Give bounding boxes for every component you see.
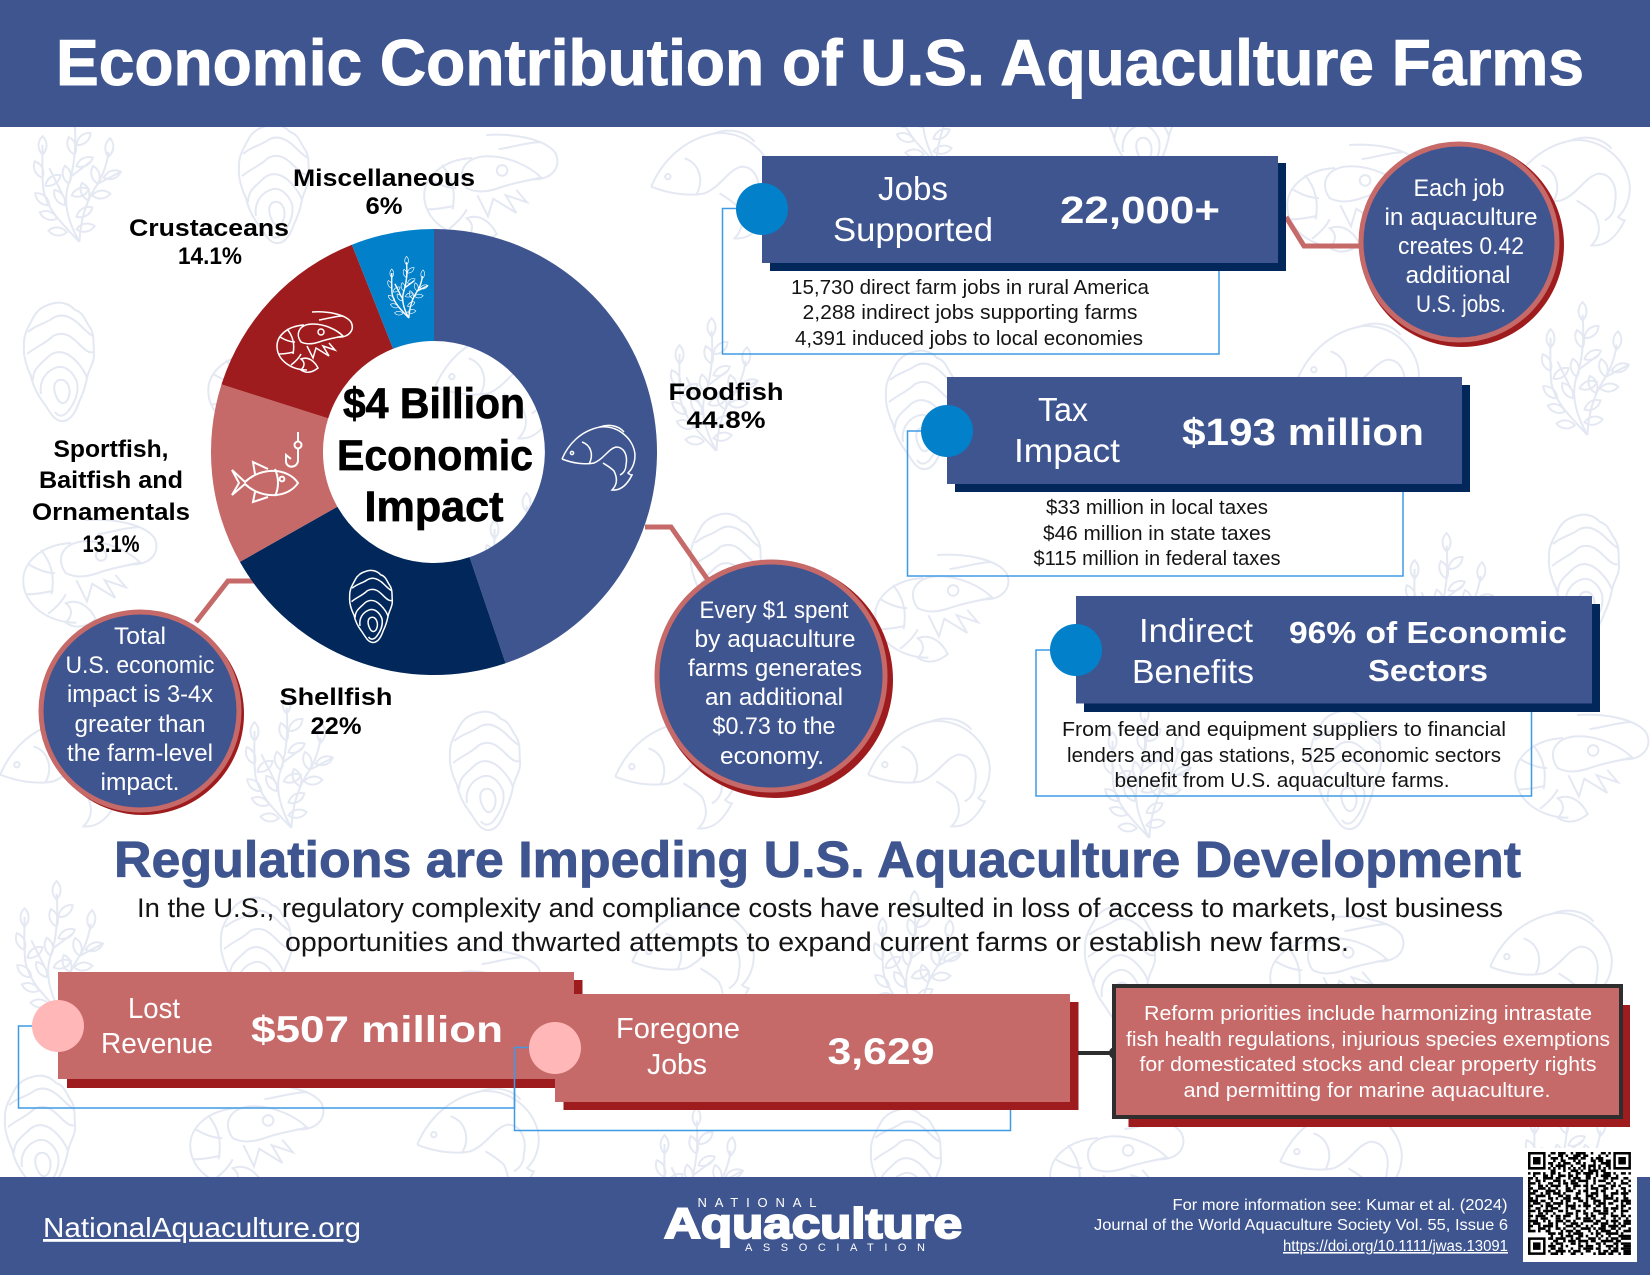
QR code [1523,1148,1637,1262]
details text: benefit from U.S. aquaculture farms. [1114,770,1450,792]
footer band [0,1177,1650,1275]
callout: each job creates 0.42 jobs: Each job [1414,175,1504,202]
header bar [762,156,1286,271]
label: crustaceans: Crustaceans [129,215,289,242]
donut center label: $4 Billion [343,380,525,428]
slice: sportfish, baitfish and ornamentals 13.1% [211,384,337,562]
callout: every $1 spent [657,562,893,798]
label: foodfish: 44.8% [686,407,766,434]
details text: $115 million in federal taxes [1034,548,1280,570]
header bar: 22,000+ [1060,190,1220,232]
logo: National Aquaculture Association: ASSOCIATION [745,1242,925,1254]
panel: jobs supported [722,156,1286,354]
citation: For more information see: Kumar et al. (2024) [1172,1197,1508,1214]
header bar: Jobs [878,170,948,207]
label: sportfish, baitfish and ornamentals: Baitfish and [39,467,183,494]
connector: donut to 3-4x callout [196,581,256,622]
callout: reform priorities: for domesticated stocks and clear property rights [1140,1054,1596,1076]
red bar: Lost [128,993,180,1025]
label: sportfish, baitfish and ornamentals: Sportfish, [54,436,168,463]
donut center label: Impact [364,483,504,531]
details text: 2,288 indirect jobs supporting farms [802,302,1138,324]
callout: every $1 spent: farms generates [688,655,862,682]
outline box [18,1026,514,1108]
connector: jobs box to callout [1286,217,1362,246]
donut chart of farm sales by sector [211,229,657,675]
header bar: Supported [833,211,993,248]
details text: 15,730 direct farm jobs in rural America [791,277,1150,299]
callout: every $1 spent: by aquaculture [694,626,856,653]
label: sportfish, baitfish and ornamentals: Ornamentals [32,499,190,526]
panel: indirect benefits [1036,596,1600,796]
donut center label [337,380,533,531]
detail outline box [1036,650,1532,796]
header bar: Indirect [1139,612,1253,649]
red bar: $507 million [251,1009,503,1050]
connector: donut to $0.73 callout [645,527,708,580]
donut center label: Economic [337,432,533,480]
logo: National Aquaculture Association [664,1195,962,1254]
callout: reform priorities: fish health regulations, injurious species exemptions [1126,1029,1610,1051]
slice: foodfish 44.8% [434,229,657,663]
callout: reform priorities: and permitting for marine aquaculture. [1184,1080,1550,1102]
details text: $33 million in local taxes [1046,497,1268,519]
footer website link: NationalAquaculture.org [43,1212,361,1243]
header bar: Sectors [1368,653,1488,688]
details text: $46 million in state taxes [1043,523,1271,545]
detail outline box [908,431,1403,576]
citation: https://doi.org/10.1111/jwas.13091 [1283,1238,1508,1255]
details text: From feed and equipment suppliers to financial [1062,719,1506,741]
callout: each job creates 0.42 jobs: additional [1406,262,1510,289]
callout: every $1 spent: $0.73 to the [712,713,836,740]
red bar [555,994,1078,1110]
callout: each job creates 0.42 jobs: creates 0.42 [1398,233,1524,260]
header bar: 96% of Economic [1289,615,1567,650]
label: miscellaneous: Miscellaneous [293,165,475,192]
label: sportfish, baitfish and ornamentals: 13.1% [82,531,140,558]
logo: National Aquaculture Association: NATIONAL [698,1195,816,1210]
icon: foodfish [562,425,635,490]
label: shellfish [280,684,392,740]
red bar: Jobs [647,1049,707,1081]
callout: total economic impact: greater than [74,711,206,738]
header band with title: Economic Contribution of U.S. Aquaculture Farms [56,26,1584,99]
callout: each job creates 0.42 jobs: U.S. jobs. [1416,291,1506,318]
header band with title [0,0,1650,127]
callout: total economic impact [41,612,244,815]
bullet circle [1050,624,1102,676]
bullet circle [32,1000,84,1052]
panel: lost revenue [18,972,582,1108]
red bar: 3,629 [828,1031,934,1072]
label: shellfish: Shellfish [280,684,392,711]
intro paragraph: opportunities and thwarted attempts to expand current farms or establish new farms. [285,927,1349,957]
label: miscellaneous: 6% [366,193,403,220]
callout: each job creates 0.42 jobs: in aquaculture [1384,204,1538,231]
details text [1034,497,1280,570]
label: foodfish: Foodfish [668,379,784,406]
callout: reform priorities [1114,986,1630,1127]
callout: every $1 spent: economy. [720,743,824,770]
callout: total economic impact: U.S. economic [66,652,214,679]
header bar: Benefits [1132,653,1254,690]
red bar [58,972,582,1088]
detail outline box [722,208,1219,354]
citation: Journal of the World Aquaculture Society Vol. 55, Issue 6 [1094,1217,1508,1234]
details text [1062,719,1506,792]
logo: National Aquaculture Association: Aquaculture [664,1200,962,1248]
callout: every $1 spent: Every $1 spent [700,597,849,624]
label: foodfish [668,379,784,434]
label: sportfish, baitfish and ornamentals [32,436,190,558]
outline box [514,1048,1010,1130]
icon: fish on hook [232,432,302,502]
callout: reform priorities: Reform priorities include harmonizing intrastate [1144,1003,1592,1025]
label: crustaceans: 14.1% [178,243,242,270]
callout: every $1 spent: an additional [705,684,843,711]
connector to reform box [1078,1047,1121,1059]
details text [791,277,1150,350]
heading: regulations: Regulations are Impeding U.S. Aquaculture Development [114,831,1521,888]
header bar: $193 million [1182,412,1424,454]
label: crustaceans [129,215,289,270]
header bar: Tax [1038,391,1088,428]
citation [1094,1197,1508,1255]
slice: shellfish 22% [240,507,506,675]
header bar [947,377,1470,492]
icon: shrimp [277,312,352,372]
header bar [1076,596,1600,712]
callout: total economic impact: impact is 3-4x [67,681,213,708]
icon: oyster [350,570,392,642]
bullet circle [736,183,788,235]
callout: total economic impact: the farm-level [67,740,213,767]
panel: foregone jobs [514,994,1078,1130]
details text: 4,391 induced jobs to local economies [795,328,1143,350]
slice: miscellaneous 6% [352,229,434,349]
intro paragraph [137,893,1503,957]
label: shellfish: 22% [310,713,362,740]
icon: seaweed [386,256,429,318]
details text: lenders and gas stations, 525 economic sectors [1067,745,1501,767]
red bar: Foregone [616,1013,740,1045]
red bar: Revenue [101,1028,213,1060]
callout: each job creates 0.42 jobs [1360,143,1564,347]
panel: tax impact [908,377,1470,576]
callout: total economic impact: impact. [100,769,180,796]
header bar: Impact [1014,432,1120,469]
bullet circle [529,1022,581,1074]
intro paragraph: In the U.S., regulatory complexity and compliance costs have resulted in loss of access to markets, lost business [137,893,1503,923]
bullet circle [921,405,973,457]
callout: total economic impact: Total [114,623,166,650]
label: miscellaneous [293,165,475,220]
slice: crustaceans 14.1% [222,245,393,418]
